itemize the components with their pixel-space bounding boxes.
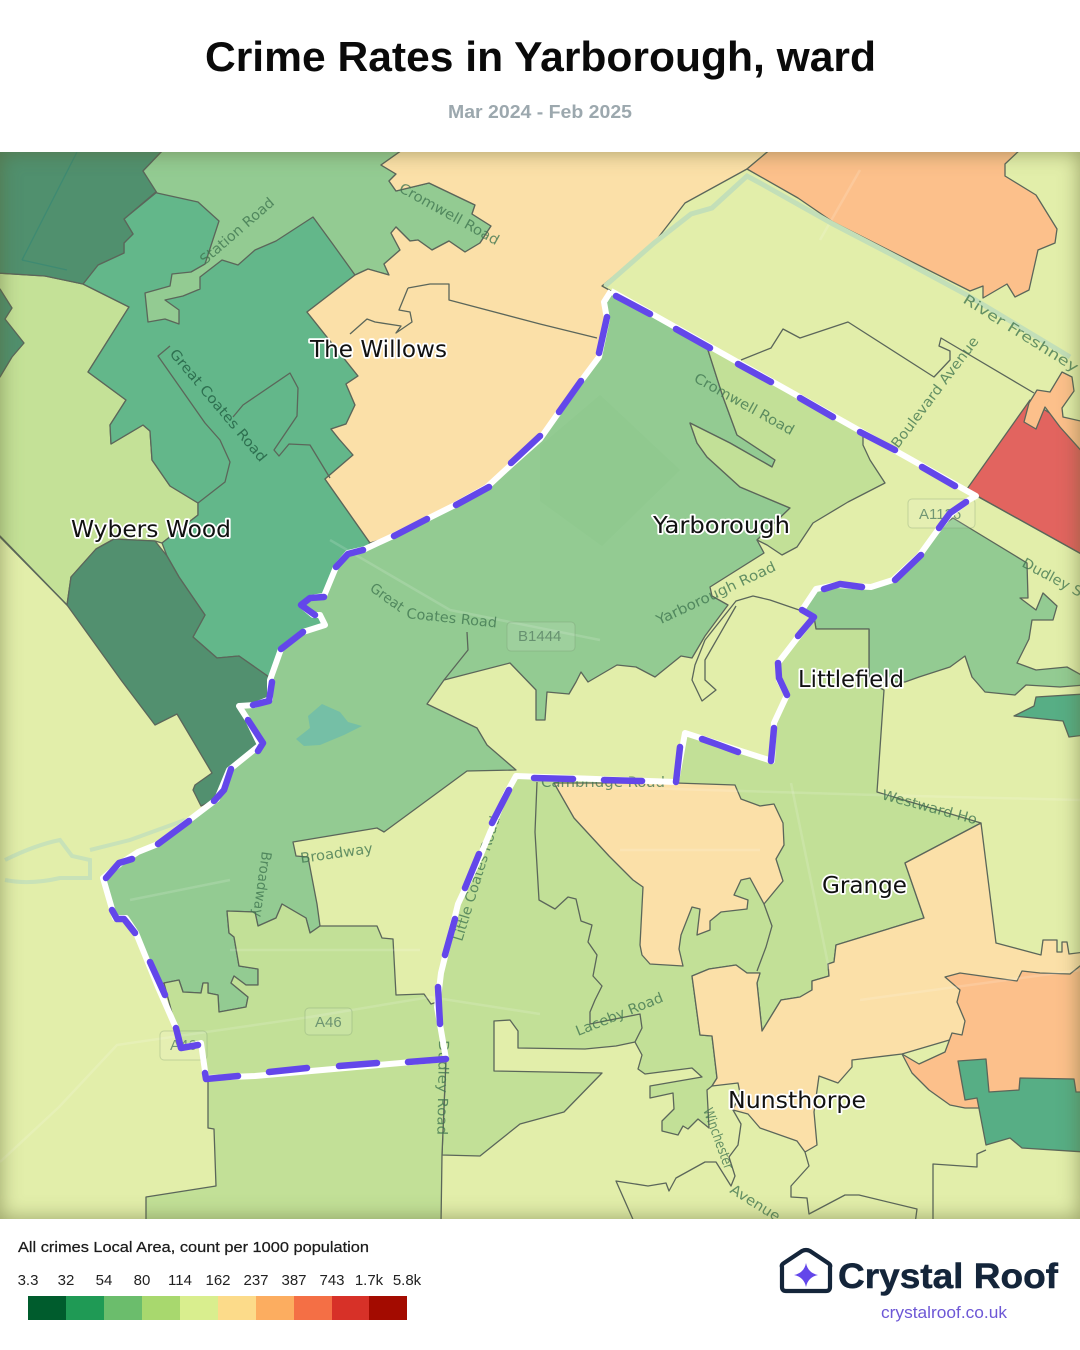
- area: east small green: [1014, 694, 1080, 737]
- road shield: B1444: B1444: [518, 628, 561, 645]
- legend scale values: 387: [281, 1272, 307, 1289]
- road labels: Boulevard Avenue: [888, 334, 982, 451]
- area: Station Road mid green: [143, 148, 491, 324]
- place label: Yarborough: Yarborough: [652, 513, 790, 539]
- road labels: Cromwell Road: [396, 181, 502, 249]
- legend scale values: 32: [58, 1272, 74, 1289]
- icon: house outline: [782, 1250, 830, 1291]
- road labels: Dudley Road: [433, 1040, 451, 1135]
- area: north-west dark: [0, 148, 165, 284]
- legend title: All crimes Local Area, count per 1000 population: [18, 1239, 369, 1256]
- road labels: Laceby Road: [574, 990, 666, 1040]
- legend scale values: 3.3: [18, 1272, 38, 1289]
- area: Littlefield east mid green: [802, 518, 1080, 695]
- road shield: A46: [305, 1008, 352, 1035]
- road labels: River Freshney: [960, 292, 1080, 376]
- place label: Littlefield: Littlefield: [798, 667, 904, 693]
- icon: purple star: [794, 1263, 818, 1287]
- Great Coates park water: [296, 704, 362, 746]
- area: Yarborough darker centre: [540, 395, 680, 546]
- wordmark: Crystal Roof: [838, 1257, 1058, 1296]
- logo: Crystal Roof: [782, 1250, 1058, 1322]
- road labels: Little Coates Road: [451, 814, 504, 943]
- subtitle: date range: Mar 2024 - Feb 2025: [448, 101, 632, 122]
- legend: [18, 1239, 422, 1320]
- ward boundary: purple dashes: [106, 296, 966, 1079]
- area: Grange lime: [437, 617, 981, 1156]
- area: west lime: [0, 273, 198, 605]
- area: The Willows peach: [307, 148, 772, 543]
- website: crystalroof.co.uk: [881, 1304, 1008, 1322]
- choropleth map: [0, 148, 1080, 1225]
- area: A46 lime: [146, 904, 446, 1224]
- legend scale values: 237: [243, 1272, 269, 1289]
- legend scale values: 743: [319, 1272, 345, 1289]
- ward boundary: white casing: [103, 291, 976, 1078]
- area: east red: [967, 400, 1080, 556]
- road labels: [166, 181, 1080, 1225]
- road labels: Great: [367, 580, 407, 616]
- place label: The Willows: The Willows: [309, 337, 447, 363]
- road labels: Great Coates Road: [166, 346, 269, 465]
- road labels: Station Road: [197, 195, 278, 268]
- road shield: A46: A46: [315, 1014, 342, 1031]
- area: Cambridge Road peach: [554, 783, 784, 966]
- river loop south-west: [5, 820, 185, 882]
- legend scale values: 162: [205, 1272, 231, 1289]
- area: Nunsthorpe peach: [692, 823, 1080, 1152]
- legend scale values: 5.8k: [393, 1272, 422, 1289]
- road shield: A46 west: A46: [170, 1037, 197, 1054]
- area: Cromwell lime: [690, 347, 885, 555]
- area: north-east orange: [747, 148, 1057, 298]
- legend scale values: 80: [134, 1272, 150, 1289]
- area: south-east orange: [902, 962, 1080, 1108]
- area: west edge dark: [0, 289, 24, 377]
- road labels: Yarborough Road: [653, 559, 779, 629]
- road labels: Cambridge Road: [541, 775, 665, 791]
- road labels: Coates Road: [406, 606, 498, 631]
- road labels: Cromwell Road: [691, 371, 797, 439]
- legend scale values: 1.7k: [355, 1272, 384, 1289]
- place label: Grange: Grange: [822, 873, 907, 899]
- legend scale values: 114: [168, 1272, 192, 1289]
- area: south-east green: [958, 1059, 1080, 1152]
- title: Crime Rates in Yarborough, ward: [205, 33, 876, 80]
- road labels: Broadway: [299, 841, 374, 867]
- road labels: Winchester: [699, 1106, 736, 1172]
- road labels: Avenue: [727, 1182, 783, 1225]
- road shield: B1444: [507, 622, 575, 651]
- place label: Nunsthorpe: Nunsthorpe: [728, 1088, 866, 1114]
- area: Yarborough mid green: [103, 291, 790, 1012]
- River Freshney: [605, 176, 1070, 357]
- legend scale values: 54: [96, 1272, 112, 1289]
- area: Wybers Wood dark: [67, 539, 270, 806]
- map base area: [0, 152, 1080, 1220]
- road shield: A1136: A1136: [919, 506, 961, 523]
- place label: Wybers Wood: Wybers Wood: [71, 517, 231, 543]
- area: Great Coates green: [83, 190, 370, 680]
- area: east orange blob: [1024, 372, 1080, 455]
- road shield: A1136: [908, 499, 975, 528]
- legend scale values: [18, 1272, 422, 1289]
- road labels: Broadway: [249, 850, 274, 918]
- legend colour bar: [28, 1296, 407, 1320]
- road shield: A46 west: [160, 1031, 207, 1060]
- road labels: Westward Ho: [880, 787, 979, 828]
